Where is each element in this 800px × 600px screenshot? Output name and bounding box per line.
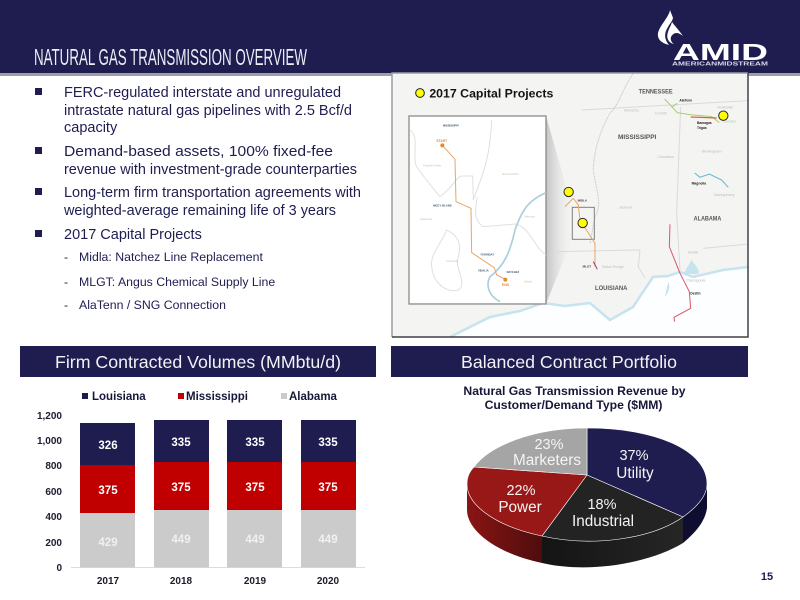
project marker: Midla north bbox=[564, 187, 573, 197]
pie labels: 37% bbox=[619, 448, 649, 464]
pie side: utility bbox=[683, 484, 707, 543]
y axis labels: 1,200 bbox=[37, 411, 62, 422]
title: NATURAL GAS TRANSMISSION OVERVIEW bbox=[34, 44, 307, 70]
sub-bullets: AlaTenn / SNG Connection bbox=[79, 298, 226, 312]
bar 2018: 449 bbox=[171, 534, 191, 546]
bar 2020: 335 bbox=[318, 437, 338, 449]
banner: firm contracted volumes: Firm Contracted Volumes (MMbtu/d) bbox=[55, 352, 341, 372]
bullet: FERC-regulated pipelines: intrastate natural gas pipelines with 2.5 Bcf/d bbox=[64, 103, 352, 119]
inset parish lines bbox=[410, 120, 546, 291]
city labels: Jackson bbox=[619, 205, 632, 209]
bar 2017: 326 bbox=[98, 440, 118, 452]
y axis labels: 1,000 bbox=[37, 436, 62, 447]
pie labels: Utility bbox=[616, 465, 654, 482]
state labels: ALABAMA bbox=[694, 215, 721, 222]
city labels: Pascagoula bbox=[686, 278, 706, 282]
pipeline labels: AlaTenn bbox=[679, 98, 692, 102]
bar 2020: 449 bbox=[318, 534, 338, 546]
logo subtitle: AMERICANMIDSTREAM bbox=[672, 62, 768, 68]
pie chart title bbox=[463, 384, 686, 412]
inset map: Adams bbox=[524, 280, 533, 284]
slice: marketers bbox=[474, 428, 587, 475]
city labels: Corinth bbox=[655, 111, 667, 115]
Bamagas pipeline bbox=[691, 115, 717, 120]
bullet: FERC-regulated pipelines: FERC-regulated interstate and unregulated bbox=[64, 85, 341, 101]
pipeline labels: Magnolia bbox=[692, 181, 706, 185]
inset map: END bbox=[502, 283, 510, 287]
y axis labels: 400 bbox=[45, 512, 62, 523]
pipeline labels bbox=[679, 98, 712, 295]
pie chart title: Natural Gas Transmission Revenue by bbox=[463, 384, 686, 398]
y axis labels: 600 bbox=[45, 487, 62, 498]
x axis labels: 2019 bbox=[244, 576, 267, 587]
inset river bbox=[488, 193, 546, 302]
slice: power bbox=[467, 467, 587, 536]
bar 2019: 375 bbox=[245, 482, 265, 494]
banner: balanced contract portfolio: Balanced Contract Portfolio bbox=[461, 352, 677, 372]
bullet: long-term agreements: Long-term firm transportation agreements with bbox=[64, 185, 361, 201]
locator box bbox=[572, 207, 594, 239]
inset map: MLGT bbox=[583, 264, 591, 268]
sub-bullets: - bbox=[64, 250, 68, 264]
project marker: Midla south bbox=[578, 218, 587, 228]
city labels bbox=[602, 106, 737, 282]
bar 2019 bbox=[227, 420, 282, 568]
logo wordmark: AMID bbox=[673, 39, 768, 65]
icon: flame bbox=[658, 10, 683, 45]
inset map: Concordia bbox=[446, 259, 459, 263]
y axis labels bbox=[37, 411, 62, 574]
page number: 15 bbox=[761, 571, 773, 583]
map panel bbox=[392, 73, 748, 337]
slice: industrial bbox=[542, 475, 683, 541]
inset map: Catahoula bbox=[420, 217, 433, 221]
AlaTenn pipeline bbox=[665, 99, 719, 123]
city labels: Huntsville bbox=[717, 106, 733, 110]
inset map: Jefferson bbox=[524, 214, 535, 218]
pie labels: 22% bbox=[506, 483, 536, 499]
sub-bullets: Midla: Natchez Line Replacement bbox=[79, 250, 263, 264]
bullet: 2017 capital projects: 2017 Capital Projects bbox=[64, 227, 202, 243]
sub-bullets: MLGT: Angus Chemical Supply Line bbox=[79, 275, 275, 289]
bullet: demand-based assets: Demand-based assets, 100% fixed-fee bbox=[64, 144, 333, 160]
pie labels: Power bbox=[498, 499, 542, 516]
x axis labels: 2018 bbox=[170, 576, 193, 587]
bar 2017: 429 bbox=[98, 537, 118, 549]
bar 2020: 375 bbox=[318, 482, 338, 494]
city labels: Montgomery bbox=[714, 193, 735, 197]
x axis labels: 2017 bbox=[97, 576, 120, 587]
bar 2017: 375 bbox=[98, 485, 118, 497]
bullet: demand-based assets bbox=[35, 144, 357, 178]
magnifier shadow bbox=[546, 116, 572, 304]
place labels: MIDLA bbox=[578, 198, 588, 202]
city labels: Baton Rouge bbox=[602, 265, 624, 269]
state labels: MISSISSIPPI bbox=[618, 134, 656, 141]
bullet: long-term agreements bbox=[35, 185, 361, 219]
bullet: FERC-regulated pipelines bbox=[35, 85, 352, 136]
state labels bbox=[595, 88, 721, 292]
bullet list bbox=[35, 85, 361, 312]
x axis labels bbox=[97, 576, 340, 587]
inset labels: VIDALIA bbox=[478, 268, 489, 272]
inset labels: NATCHEZ bbox=[507, 270, 520, 274]
inset labels bbox=[433, 123, 520, 274]
sub-bullets bbox=[64, 250, 275, 312]
pie labels: Industrial bbox=[572, 513, 634, 530]
stacked bar chart bbox=[37, 391, 365, 587]
pie labels: 23% bbox=[534, 437, 564, 453]
city labels: Columbus bbox=[657, 155, 674, 159]
sub-bullets: - bbox=[64, 275, 68, 289]
banner: firm contracted volumes bbox=[20, 346, 376, 377]
Magnolia pipeline bbox=[695, 173, 728, 187]
bullet: FERC-regulated pipelines: capacity bbox=[64, 120, 118, 136]
pie labels: 18% bbox=[587, 497, 617, 513]
inset map bbox=[409, 86, 597, 304]
bar 2020 bbox=[301, 420, 356, 568]
inset pipeline bbox=[442, 145, 505, 279]
inset labels: FERRIDAY bbox=[481, 252, 494, 256]
y axis labels: 800 bbox=[45, 461, 62, 472]
map frame bbox=[392, 73, 748, 337]
bullet: long-term agreements: weighted-average remaining life of 3 years bbox=[63, 203, 336, 219]
banner: balanced contract portfolio bbox=[391, 346, 748, 377]
pipeline labels: Trigas bbox=[697, 126, 707, 130]
state labels: LOUISIANA bbox=[595, 285, 628, 292]
map legend: 2017 capital projects: 2017 Capital Projects bbox=[429, 86, 554, 100]
chart legend: Mississippi bbox=[186, 391, 248, 403]
pie side: power bbox=[467, 484, 542, 563]
bay water bbox=[665, 260, 699, 297]
inset labels: MISSISSIPPI bbox=[443, 123, 459, 127]
sub-bullets: - bbox=[64, 298, 68, 312]
state borders and Mississippi river bbox=[557, 73, 748, 278]
x axis labels: 2020 bbox=[317, 576, 340, 587]
pie chart title: Customer/Demand Type ($MM) bbox=[485, 398, 662, 412]
chart legend bbox=[82, 391, 338, 403]
logo bbox=[658, 10, 768, 68]
pie side: industrial bbox=[542, 517, 683, 567]
pie labels bbox=[498, 437, 654, 530]
header band bbox=[0, 0, 800, 76]
chart legend: Alabama bbox=[289, 391, 338, 403]
inset labels: NICEY ISLAND bbox=[433, 203, 452, 207]
map background bbox=[392, 73, 748, 337]
city labels: Decatur bbox=[723, 120, 737, 124]
city labels: Memphis bbox=[624, 108, 639, 112]
3D pie chart bbox=[467, 428, 707, 567]
chart legend: Louisiana bbox=[92, 391, 146, 403]
Destin pipeline bbox=[669, 224, 691, 322]
bar 2019: 335 bbox=[245, 437, 265, 449]
inset map: Tensas Parish bbox=[502, 172, 519, 176]
inset frame bbox=[409, 116, 546, 304]
y axis labels: 200 bbox=[45, 538, 62, 549]
coastline bbox=[450, 267, 748, 337]
bar 2018 bbox=[154, 420, 209, 568]
pipeline labels: Bamagas bbox=[697, 121, 712, 125]
gulf water bbox=[450, 267, 748, 337]
Midla pipeline bbox=[565, 198, 595, 267]
baseline bbox=[71, 566, 365, 568]
project marker: AlaTenn bbox=[719, 111, 728, 120]
city labels: Birmingham bbox=[702, 150, 722, 154]
bullet: demand-based assets: revenue with investment-grade counterparties bbox=[64, 162, 357, 178]
pie labels: Marketers bbox=[513, 452, 581, 469]
bar 2019: 449 bbox=[245, 534, 265, 546]
y axis labels: 0 bbox=[56, 563, 62, 574]
eastern map bbox=[595, 88, 737, 322]
bar 2017 bbox=[80, 423, 135, 568]
bar 2018: 335 bbox=[171, 437, 191, 449]
state labels: TENNESSEE bbox=[639, 88, 673, 95]
inset map: START bbox=[436, 139, 447, 143]
pipeline labels: Destin bbox=[690, 291, 700, 295]
bar 2018: 375 bbox=[171, 482, 191, 494]
inset map: Franklin Parish bbox=[423, 164, 442, 168]
slice: utility bbox=[587, 428, 707, 517]
city labels: Mobile bbox=[688, 251, 698, 255]
